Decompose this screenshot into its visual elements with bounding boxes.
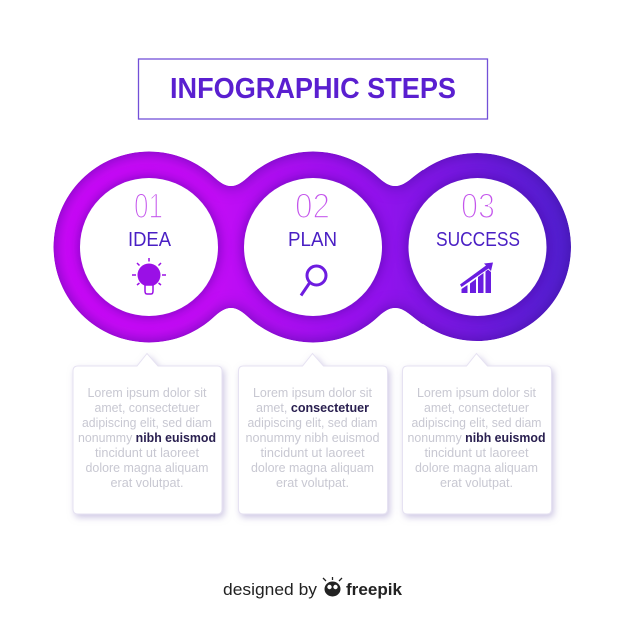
white disc 1 [80,178,218,316]
card text: dolore magna aliquam [86,461,208,475]
title frame [138,59,488,119]
label SUCCESS: SUCCESS [436,228,520,251]
label IDEA: IDEA [128,228,171,251]
card text: Lorem ipsum dolor sit [253,386,373,400]
white disc 3 [408,178,546,316]
card text: Lorem ipsum dolor sit [88,386,207,400]
card text: erat volutpat. [440,476,513,490]
panel: step 2 description [238,354,388,514]
card text: tincidunt ut laoreet [424,446,529,460]
card text [408,386,546,490]
card text: nonummy nibh euismod [78,431,216,445]
icon: rising bar chart [460,262,493,293]
freepik wordmark: freepik [346,580,403,599]
title text: INFOGRAPHIC STEPS [170,73,456,105]
label PLAN: PLAN [288,228,337,251]
title [138,59,488,119]
icon: freepik logo [323,577,342,596]
step 2 content [288,187,337,296]
card text: dolore magna aliquam [251,461,374,475]
footer credit [223,577,403,599]
card shape [402,354,552,514]
card text: adipiscing elit, sed diam [248,416,378,430]
ring body [54,152,571,342]
card text: tincidunt ut laoreet [95,446,200,460]
number 02: 02 [295,187,330,226]
card text: dolore magna aliquam [415,461,538,475]
white disc 2 [244,178,382,316]
card text: erat volutpat. [276,476,349,490]
icon: light bulb [132,258,166,294]
number 01: 01 [134,187,163,226]
card text: Lorem ipsum dolor sit [417,386,537,400]
gradient ring band with three steps [54,152,571,342]
card text: nonummy nibh euismod [408,431,546,445]
panel: step 1 description [73,354,222,514]
card text [246,386,380,490]
card text: adipiscing elit, sed diam [82,416,212,430]
step 3 content [436,187,520,293]
card text [78,386,216,490]
step 1 content [128,187,171,294]
card shape [238,354,388,514]
number 03: 03 [461,187,495,226]
panel: step 3 description [402,354,552,514]
card text: adipiscing elit, sed diam [412,416,542,430]
designed by text: designed by [223,581,318,599]
card text: erat volutpat. [110,476,184,490]
card text: amet, consectetuer [256,401,369,415]
card text: nonummy nibh euismod [246,431,380,445]
card text: tincidunt ut laoreet [260,446,365,460]
card text: amet, consectetuer [424,401,529,415]
card shape [73,354,222,514]
card text: amet, consectetuer [94,401,200,415]
icon: magnifying glass [301,266,326,296]
